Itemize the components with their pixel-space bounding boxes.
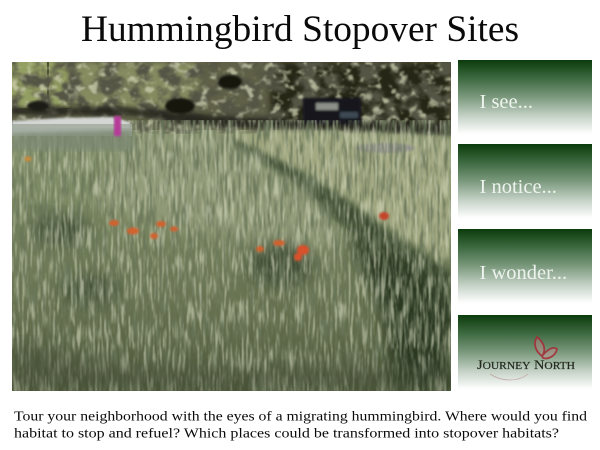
photo detail: magenta post [114, 116, 121, 136]
photo detail: orange flowers [24, 156, 389, 261]
photo detail: lower grass texture [12, 250, 451, 391]
panel: I notice [458, 144, 592, 219]
photo detail: tree line [12, 62, 451, 136]
photo detail: upper grass texture [12, 132, 451, 257]
panel: I wonder [458, 229, 592, 304]
logo wordmark: JOURNEY NORTH [477, 358, 575, 372]
photo detail: mid dark shrubs [30, 214, 314, 304]
logo arc [490, 374, 528, 380]
photo detail: cabin [303, 98, 361, 124]
photo detail: white fence [12, 117, 135, 150]
photo detail: lower right dark grass [345, 230, 451, 391]
photo detail: dark path band [215, 135, 451, 335]
panel: Journey North logo [458, 315, 592, 390]
photo detail: foreground shadow [12, 340, 451, 391]
icon: red butterfly [535, 337, 557, 358]
photo detail: upper right meadow [212, 130, 451, 262]
title: Hummingbird Stopover Sites [81, 9, 519, 50]
photo detail: light centre meadow [90, 132, 350, 250]
photo: hummingbird stopover meadow [12, 62, 451, 391]
photo detail: lavender patch [355, 143, 415, 153]
panel: I see: I see... [480, 91, 533, 113]
body text: habitat to stop and refuel? Which places could be transformed into stopover habitats? [14, 426, 559, 442]
body text: Tour your neighborhood with the eyes of a migrating hummingbird. Where would you find [14, 410, 587, 424]
panel: I wonder: I wonder... [480, 262, 567, 284]
body text [14, 410, 587, 442]
panel: I see [458, 60, 592, 135]
panel: I notice: I notice... [480, 176, 557, 198]
